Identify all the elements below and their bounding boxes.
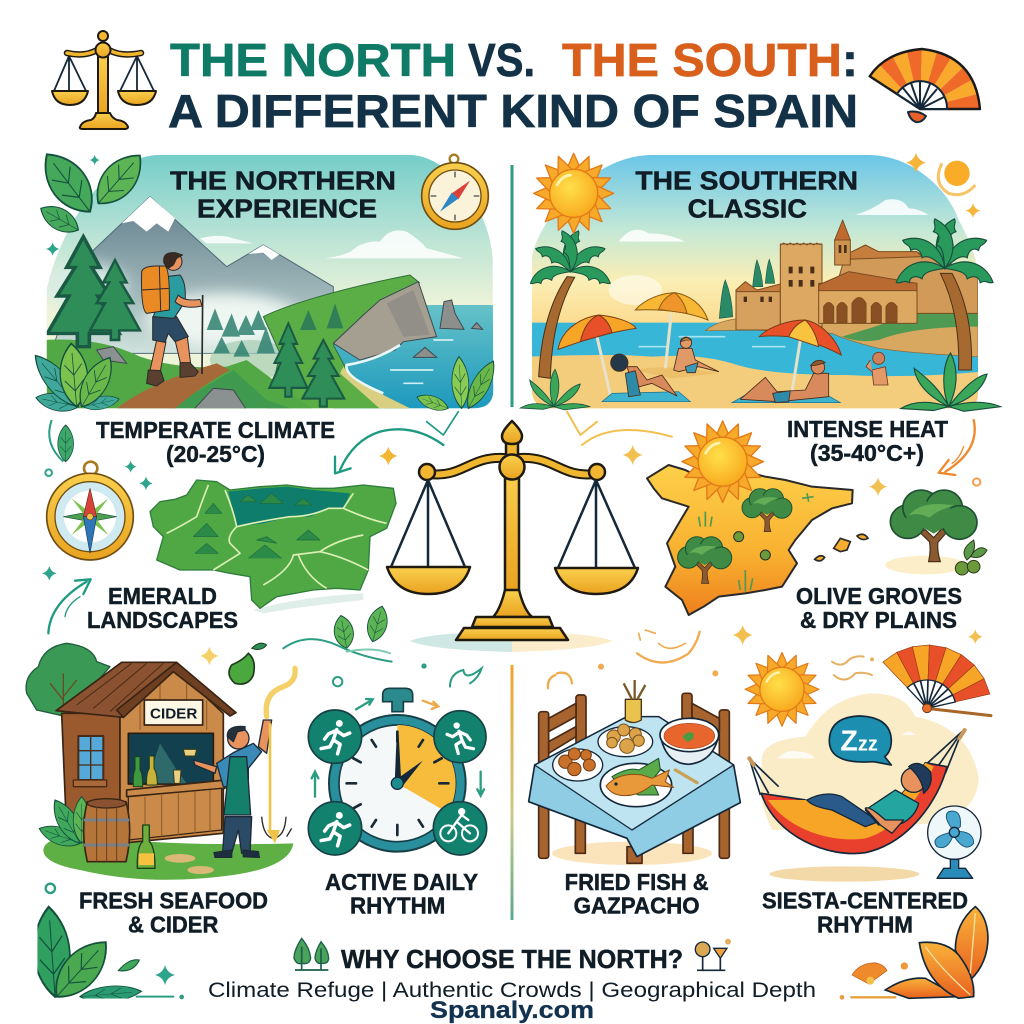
rock: [97, 347, 247, 410]
label: active daily rhythm: RHYTHM: [350, 893, 445, 919]
icon: compass: [47, 462, 133, 560]
label: emerald landscapes: [87, 583, 238, 633]
arrow: curved to map: [335, 412, 458, 473]
sunbather right: [740, 360, 829, 403]
electric fan: [928, 806, 981, 878]
map of spain: [647, 421, 868, 615]
icon: olive tree: [885, 490, 987, 575]
label: olive groves: OLIVE GROVES: [796, 583, 962, 609]
site name: Spanaly.com: [430, 997, 594, 1024]
icon: pear: [229, 643, 267, 684]
green headland: [263, 275, 419, 413]
cycle arrows: [312, 699, 484, 797]
chairs: [539, 693, 729, 863]
alhambra: [736, 220, 978, 330]
valley haze: [210, 340, 279, 378]
base shadow: [410, 632, 512, 652]
activity circles: [308, 710, 362, 763]
icon: sun on panel: [534, 153, 614, 233]
towels: [602, 392, 840, 403]
man: [807, 763, 931, 833]
bowl: gazpacho: [660, 718, 719, 764]
closing section: why choose the north: [208, 938, 816, 1024]
bottle front: [137, 825, 155, 868]
sea: [529, 323, 982, 379]
title versus: VS.: [468, 34, 535, 86]
shore: [340, 366, 410, 408]
foreground leaves right: [415, 356, 501, 414]
fog: [147, 293, 300, 347]
label: fresh seafood: [79, 887, 268, 938]
south panel heading: THE SOUTHERN: [635, 165, 858, 195]
label: siesta rhythm: [762, 887, 968, 938]
sea: [333, 305, 497, 412]
headland: [704, 318, 978, 357]
north panel heading: EXPERIENCE: [197, 193, 377, 223]
feature: temperate climate: TEMPERATE CLIMATE: [96, 417, 335, 443]
arrow: up left: [48, 579, 91, 633]
icon: sun: [745, 653, 819, 726]
divider top: [510, 165, 514, 407]
clouds: [200, 230, 463, 258]
foreground leaves left: [27, 342, 121, 415]
label: siesta rhythm: SIESTA-CENTERED: [762, 887, 968, 913]
label: emerald landscapes: EMERALD: [108, 583, 217, 609]
sparkles: [42, 447, 398, 581]
panel: northern experience: [27, 144, 501, 415]
pillar: [505, 470, 519, 591]
decor: swirl arrow: [548, 630, 718, 688]
sand: [529, 355, 982, 412]
south panel heading: CLASSIC: [688, 193, 807, 223]
trail: [115, 363, 230, 410]
icon: cider stand: [26, 643, 295, 880]
icon: table: [529, 680, 740, 865]
label: fried fish: GAZPACHO: [574, 893, 700, 919]
feature: intense heat: [787, 416, 948, 466]
zzz bubble: [829, 716, 891, 765]
icon: glasses: [695, 939, 731, 970]
south mid section illustrations: [567, 412, 987, 645]
label: emerald landscapes: LANDSCAPES: [87, 607, 238, 633]
plate: croquettes: [598, 724, 653, 757]
feature: temperate climate: (20-25°C): [166, 441, 265, 467]
umbrella two: [635, 293, 708, 368]
cup in hand and pour: [183, 749, 197, 756]
sea stacks: [413, 300, 483, 357]
umbrella three: [759, 320, 841, 392]
foreground hill: [43, 340, 317, 412]
north bottom row: [26, 639, 487, 1008]
wind lines: [832, 656, 872, 680]
divider bottom: [510, 665, 514, 920]
icon: fan: [883, 645, 991, 716]
sunbather left: [611, 354, 677, 397]
title south: THE SOUTH :: [562, 34, 858, 86]
cliffs: [333, 282, 437, 360]
arrow: orange to olives: [939, 420, 975, 475]
standing child: [866, 352, 888, 385]
umbrella one: [558, 315, 636, 395]
leaf sprig: [332, 604, 391, 650]
summary line: Climate Refuge | Authentic Crowds | Geographical Depth: [208, 979, 816, 1002]
mountains: [50, 197, 333, 353]
beam: [430, 458, 594, 474]
north mid section illustrations: [42, 412, 458, 650]
icon: small sun and moon: [906, 153, 980, 218]
feature: intense heat: INTENSE HEAT: [787, 416, 948, 442]
roof: [56, 662, 177, 717]
cabin: [62, 713, 120, 837]
right pan: [555, 480, 638, 594]
icon: stopwatch: [308, 688, 487, 855]
label: active daily rhythm: ACTIVE DAILY: [325, 869, 478, 895]
icon: trees: [294, 938, 329, 970]
left pan: [387, 480, 470, 594]
hammock scene: [749, 693, 981, 882]
arrow: yellow from panel: [567, 412, 672, 445]
label: fresh seafood: FRESH SEAFOOD: [79, 887, 268, 913]
distant pines: [207, 308, 275, 357]
pourer: [193, 720, 272, 857]
sitter: [674, 337, 719, 373]
sparkles: [623, 445, 983, 645]
icon: leaf sprout: [49, 420, 74, 462]
agave right: [901, 353, 1000, 411]
bush tree: [26, 643, 110, 717]
cloth: [529, 717, 740, 857]
cider sign: CIDER: [150, 706, 198, 722]
feature: intense heat: (35-40°C+): [810, 440, 924, 466]
north panel heading: THE NORTHERN: [170, 165, 396, 195]
label: active daily rhythm: [325, 869, 478, 919]
base: [493, 590, 532, 617]
heading: why choose: WHY CHOOSE THE NORTH?: [341, 944, 683, 974]
feature: temperate climate: [96, 417, 335, 467]
barrel: [84, 802, 130, 862]
label: fried fish: [565, 869, 709, 919]
palm left: [527, 228, 614, 378]
title block: [168, 34, 858, 137]
leafy sprig decoration: [283, 639, 482, 687]
center balance scale: [387, 421, 638, 652]
cypress: [719, 259, 775, 318]
south panel heading: [635, 165, 858, 223]
ground: [43, 836, 293, 880]
zzz bubble: Zzz: [840, 726, 878, 758]
agave left: [520, 369, 590, 410]
pines on headland: [300, 303, 343, 330]
label: olive groves: [796, 583, 962, 633]
north panel heading: [170, 165, 396, 223]
clouds: [619, 199, 929, 242]
icon: balance scale top left: [52, 31, 156, 129]
condiment jar: [625, 699, 641, 722]
plate: fried fish: [600, 758, 674, 807]
palm right: [892, 216, 997, 370]
ropes: [749, 732, 962, 795]
icon: compass on panel: [422, 155, 488, 229]
label: fried fish: FRIED FISH &: [565, 869, 709, 895]
label: siesta rhythm: RHYTHM: [817, 912, 913, 938]
title line two: A DIFFERENT KIND OF SPAIN: [168, 85, 858, 137]
hammock body: [761, 763, 947, 854]
label: fresh seafood: & CIDER: [128, 912, 219, 938]
title north: THE NORTH: [170, 34, 456, 86]
plate: tapas: [553, 748, 603, 781]
pine trees: [47, 237, 119, 347]
serving hatch: [128, 733, 213, 784]
bottles on counter: [133, 757, 143, 787]
north green map: [150, 480, 396, 613]
decor: bottom right leaves: [840, 907, 988, 1000]
decor: bottom left leaves: [31, 884, 184, 1008]
icon: leaves upper left: [33, 144, 152, 256]
bush left of barrel: [36, 821, 83, 851]
cider sign: [144, 700, 203, 725]
window: [78, 736, 103, 780]
hiker: [142, 253, 203, 386]
icon: fan top right: [870, 49, 980, 122]
label: olive groves: & DRY PLAINS: [800, 607, 957, 633]
south bottom row: [529, 630, 991, 1000]
stepping stones: [165, 854, 195, 863]
knobs: [419, 464, 435, 480]
panel: southern classic: [520, 153, 1000, 412]
